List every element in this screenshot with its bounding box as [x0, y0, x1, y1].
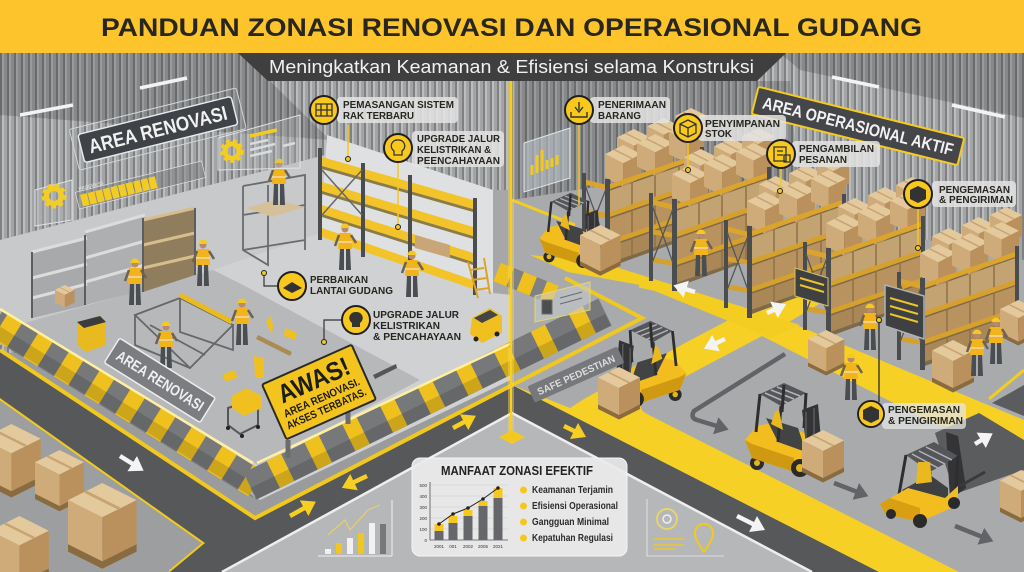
sign: area operasional aktif: AREA OPERASIONAL AKTIF — [760, 94, 955, 159]
yellow upper lane — [530, 255, 800, 338]
label: penyimpanan stok: PENYIMPANAN — [705, 118, 780, 130]
benefit list: Efisiensi Operasional — [532, 501, 618, 512]
header bar — [0, 0, 1024, 53]
label: pemasangan sistem — [310, 96, 458, 162]
combo chart: 100 — [419, 527, 427, 532]
progress bar — [74, 156, 206, 209]
yellow machine — [470, 308, 502, 343]
combo chart: 0 — [424, 538, 427, 543]
back barrier — [497, 272, 555, 295]
left floor — [0, 233, 640, 500]
label: penyimpanan stok — [674, 114, 786, 172]
roads — [0, 350, 879, 572]
label: penyimpanan stok: STOK — [705, 128, 732, 140]
boards — [795, 268, 924, 339]
benefit list — [520, 485, 618, 544]
right barrier — [250, 312, 608, 494]
left barrier — [0, 309, 256, 492]
lower scaffold — [135, 295, 233, 368]
label: pengemasan bottom: & PENGIRIMAN — [888, 415, 963, 427]
lower left floor — [0, 398, 205, 572]
right hologram chart — [524, 128, 570, 192]
label: pengemasan bottom: PENGEMASAN — [888, 404, 960, 416]
benefit list: Gangguan Minimal — [532, 517, 609, 528]
thin yellow floor lines — [512, 200, 1024, 494]
label: upgrade jalur bottom: KELISTRIKAN — [373, 320, 440, 332]
label: penerimaan barang: BARANG — [598, 110, 641, 122]
small bar chart — [318, 500, 392, 556]
label: pengambilan pesanan — [767, 140, 880, 194]
darker renovation floor — [0, 270, 420, 465]
right wall — [512, 53, 1024, 353]
label: pengambilan pesanan: PENGAMBILAN — [799, 143, 874, 155]
generator left — [77, 316, 106, 352]
dark road corner — [935, 413, 1024, 494]
tools — [222, 316, 397, 382]
workers left — [125, 158, 423, 368]
combo chart — [419, 482, 508, 549]
floor arrows — [120, 288, 985, 538]
label: upgrade jalur bottom: UPGRADE JALUR — [373, 309, 459, 321]
label: penerimaan barang — [565, 96, 670, 205]
metal shelves — [32, 208, 195, 318]
ceiling lights — [20, 77, 1005, 117]
yellow left shelving — [320, 148, 475, 295]
center divider line — [499, 81, 525, 444]
warning sign posts — [288, 408, 348, 458]
label: upgrade jalur bottom: & PENCAHAYAAN — [373, 331, 461, 343]
benefit list: Keamanan Terjamin — [532, 485, 613, 496]
warning sign: awas: AREA RENOVASI. — [282, 376, 362, 421]
label: penerimaan barang: PENERIMAAN — [598, 99, 666, 111]
subtitle banner — [238, 53, 786, 81]
right floor — [512, 180, 1024, 572]
combo chart: 400 — [419, 494, 427, 499]
label: pengemasan top: & PENGIRIMAN — [939, 194, 1013, 206]
label: perbaikan lantai: PERBAIKAN — [310, 274, 368, 286]
label: perbaikan lantai: LANTAI GUDANG — [310, 285, 393, 297]
title: PANDUAN ZONASI RENOVASI DAN OPERASIONAL GUDANG — [101, 14, 922, 42]
combo chart: 001 — [449, 544, 457, 549]
subtitle banner: Meningkatkan Keamanan & Efisiensi selama Konstruksi — [269, 57, 754, 77]
combo chart: 2005 — [478, 544, 489, 549]
label: upgrade jalur top: PEENCAHAYAAN — [417, 155, 500, 167]
sign: safe pedestian: SAFE PEDESTIAN — [536, 354, 617, 398]
lower left floor yellow line — [0, 398, 205, 572]
partition wall — [320, 135, 493, 293]
combo chart: 200 — [419, 516, 427, 521]
sign: safe pedestian — [527, 346, 624, 403]
forklift receiving — [539, 193, 621, 276]
workers right — [691, 230, 1007, 400]
yellow floor outline — [0, 278, 642, 518]
label: pemasangan sistem: PEMASANGAN SISTEM — [343, 99, 454, 111]
lower left boxes — [0, 424, 137, 572]
label: upgrade jalur top: KELISTRIKAN & — [417, 144, 491, 156]
label: pengambilan pesanan: PESANAN — [799, 154, 847, 166]
panel heading: MANFAAT ZONASI EFEKTIF — [441, 464, 593, 478]
sign: area renovasi — [69, 88, 246, 170]
white road lines — [222, 413, 812, 572]
ladder — [468, 258, 490, 298]
small hologram — [535, 282, 590, 322]
left wall upper dark band — [0, 53, 330, 140]
left wall — [0, 53, 512, 353]
cart with welder — [226, 388, 262, 438]
panel: manfaat zonasi efektif — [412, 458, 627, 556]
label: upgrade jalur bottom — [322, 306, 461, 344]
label: pengemasan top — [904, 180, 1016, 250]
combo chart: 2001 — [434, 544, 445, 549]
forklift 2 — [745, 383, 844, 482]
right back wall — [512, 81, 800, 210]
racks right — [582, 108, 1022, 370]
label: upgrade jalur top — [384, 131, 504, 230]
upper scaffold — [243, 175, 305, 265]
hologram panel: progress — [35, 156, 206, 226]
forklift 3 — [880, 432, 985, 528]
right wall upper dark band — [780, 53, 1024, 118]
center floor — [222, 413, 812, 572]
progress bar: PROGRESS — [78, 180, 104, 191]
combo chart: 500 — [419, 483, 427, 488]
pallet boxes — [808, 300, 1024, 522]
label: pengemasan bottom — [858, 318, 966, 429]
label: pengemasan top: PENGEMASAN — [939, 184, 1010, 196]
benefit list: Kepatuhan Regulasi — [532, 533, 613, 544]
forklift 1 — [598, 321, 686, 420]
warning sign: awas: AKSES TERBATAS. — [285, 386, 368, 432]
label: upgrade jalur top: UPGRADE JALUR — [417, 133, 500, 145]
combo chart: 2021 — [493, 544, 504, 549]
floor sign: area renovasi: AREA RENOVASI — [113, 348, 207, 415]
label: perbaikan lantai — [262, 270, 393, 300]
hologram panel: gear and lines — [218, 115, 300, 170]
combo chart: 300 — [419, 505, 427, 510]
warning sign: awas: AWAS! — [273, 351, 355, 409]
location hologram — [647, 499, 724, 556]
label: pemasangan sistem: RAK TERBARU — [343, 110, 414, 122]
combo chart: 2002 — [463, 544, 474, 549]
sign: area renovasi: AREA RENOVASI — [87, 103, 230, 158]
warning sign: awas — [262, 345, 376, 439]
yellow main strip — [512, 265, 1024, 572]
left lower wall — [0, 155, 325, 345]
